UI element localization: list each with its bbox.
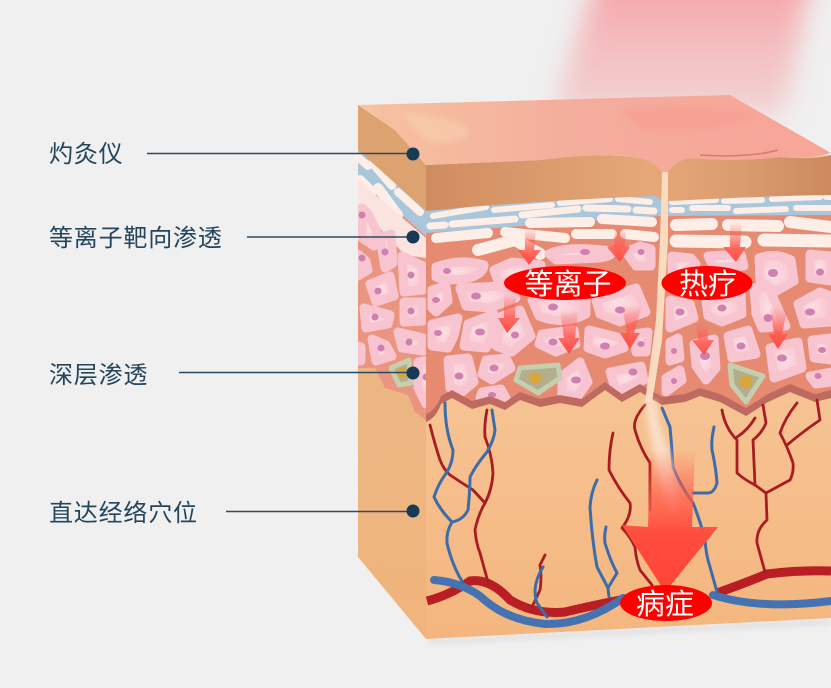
label: 直达经络穴位 [49, 500, 420, 527]
tag: 热疗 [662, 266, 752, 301]
vein branches [434, 403, 495, 522]
block shadow [426, 619, 831, 644]
surface blotches [400, 112, 470, 142]
artery branches [430, 425, 485, 503]
hair shaft [645, 172, 668, 402]
main artery [427, 571, 831, 612]
tag: 等离子: 等离子 [524, 268, 612, 301]
small arrows [498, 222, 788, 355]
skin block [358, 95, 831, 644]
green cell on left face [391, 360, 411, 385]
skin slab front [426, 155, 831, 211]
main vein [434, 580, 831, 624]
tag: 等离子 [504, 266, 626, 301]
left side slab [358, 105, 426, 211]
label: 等离子靶向渗透 [49, 225, 420, 252]
blue corneum band [426, 190, 831, 233]
dermis edge band [426, 210, 831, 422]
tag: 病症: 病症 [636, 588, 694, 621]
label: 等离子靶向渗透: 等离子靶向渗透 [49, 225, 223, 252]
light beam [552, 0, 812, 115]
dermal vessels [427, 400, 831, 624]
tag: 热疗: 热疗 [679, 268, 737, 301]
label: 灼灸仪: 灼灸仪 [49, 141, 123, 168]
corneum white cells [430, 197, 831, 226]
epidermis base [426, 200, 831, 414]
hair fade [645, 400, 680, 510]
left face cells [358, 204, 426, 408]
big red arrow [622, 450, 718, 592]
left face upper layers [358, 150, 426, 420]
granular white cells [436, 219, 831, 254]
tag: 病症 [620, 585, 712, 621]
left face [358, 105, 426, 639]
skin top surface [358, 95, 831, 172]
front face [426, 155, 831, 639]
front face cells [432, 246, 831, 402]
label: 直达经络穴位: 直达经络穴位 [49, 500, 198, 527]
green cells [516, 365, 560, 393]
label: 深层渗透: 深层渗透 [49, 362, 148, 389]
nuclei [432, 249, 826, 398]
label: 灼灸仪 [49, 141, 420, 168]
label: 深层渗透 [49, 362, 420, 389]
